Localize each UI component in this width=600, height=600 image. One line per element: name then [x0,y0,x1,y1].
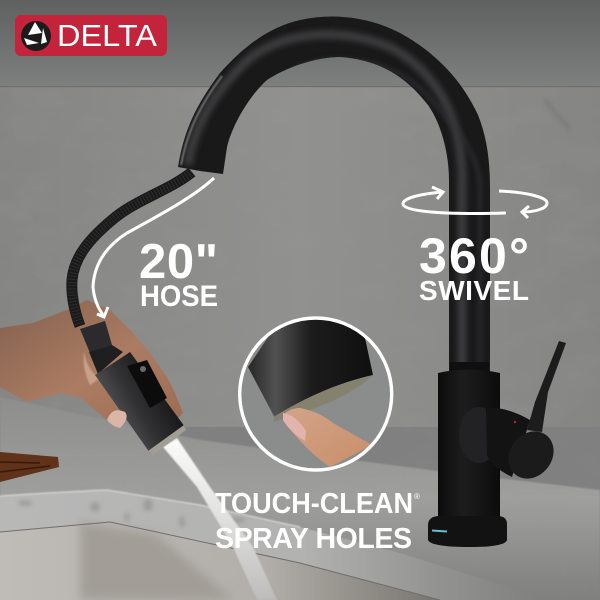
hose arrow [93,178,214,317]
base body [438,370,500,522]
20 inch hose label: HOSE [140,280,218,313]
logo mark [21,21,51,51]
hose [72,172,192,326]
sprayer nozzle rim [148,425,186,455]
thumb nail [107,410,127,428]
indicator light [432,529,447,532]
inset circle: spray holes [240,315,392,470]
touch-clean label [215,488,420,555]
faucet [178,16,566,547]
handle cylinder [486,408,530,477]
360 swivel label: SWIVEL [419,275,529,306]
swivel arrows [403,187,547,218]
sprayer head [80,321,186,455]
touch-clean label: ® [414,492,420,501]
inset spray face [273,375,373,422]
inset finger [283,408,372,467]
touch-clean label: SPRAY HOLES [215,523,412,555]
hand [0,300,183,428]
touch-clean label: TOUCH-CLEAN [215,488,413,520]
logo wordmark: DELTA [57,18,157,53]
base ring [428,516,507,547]
lever handle [527,341,566,432]
inset fingernail [283,413,306,441]
360 swivel label: 360° [419,228,529,284]
sprayer collar [80,321,112,353]
handle flange [459,407,499,463]
red indicator [514,421,516,423]
handle end cap [499,422,563,488]
water stream [163,438,277,600]
20 inch hose label [139,235,218,313]
faucet spout and stem [178,16,490,372]
cutting board [0,452,59,482]
20 inch hose label: 20" [139,235,218,289]
sprayer neck [89,345,123,374]
sprayer button [127,360,167,408]
inset spray head [248,315,373,418]
collar [450,362,489,373]
sprayer body [95,352,185,453]
logo [15,15,167,56]
